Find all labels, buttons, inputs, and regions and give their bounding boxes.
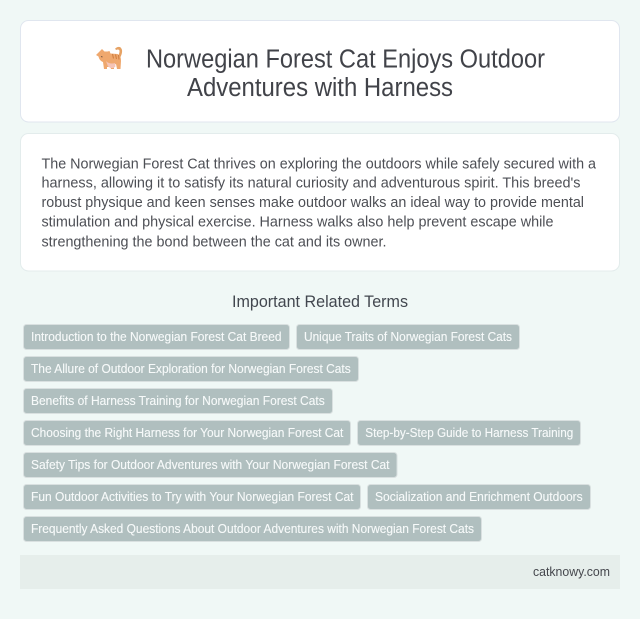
tag: allure of exploration: The Allure of Outdoor Exploration for Norwegian Forest Cats [31, 362, 351, 376]
tag: step-by-step guide: Step-by-Step Guide to Harness Training [365, 426, 573, 440]
tag: choosing the right harness: Choosing the Right Harness for Your Norwegian Forest Cat [31, 426, 344, 440]
tag: safety tips: Safety Tips for Outdoor Adventures with Your Norwegian Forest Cat [31, 458, 390, 472]
tag: introduction [24, 324, 290, 350]
title text [146, 46, 545, 102]
tag: introduction: Introduction to the Norwegian Forest Cat Breed [31, 330, 282, 344]
tag: frequently asked questions [24, 516, 482, 542]
description text: stimulation and physical exercise. Harness walks also help prevent escape while [42, 214, 554, 231]
tag: fun outdoor activities [24, 484, 360, 510]
tag: benefits of harness training: Benefits of Harness Training for Norwegian Forest Cats [31, 394, 325, 408]
icon: orange cat [96, 47, 122, 69]
tag: allure of exploration [24, 356, 358, 382]
footer source text: catknowy.com [533, 564, 610, 579]
panel: description card [20, 134, 620, 271]
tag: frequently asked questions: Frequently Asked Questions About Outdoor Adventures with Norwegian Forest Cats [31, 522, 474, 536]
panel: title card [20, 20, 620, 122]
tag: choosing the right harness [24, 420, 350, 446]
description text: robust physique and keen senses make outdoor walks an ideal way to provide mental [42, 194, 584, 211]
title text: Adventures with Harness [187, 74, 453, 102]
description text: The Norwegian Forest Cat thrives on exploring the outdoors while safely secured with a [42, 155, 597, 172]
heading: important related terms: Important Related Terms [232, 293, 408, 311]
tag: socialization and enrichment [368, 484, 590, 510]
tag: fun outdoor activities: Fun Outdoor Activities to Try with Your Norwegian Forest Cat [31, 490, 354, 504]
title text: Norwegian Forest Cat Enjoys Outdoor [146, 46, 545, 74]
tag: step-by-step guide [358, 420, 580, 446]
footer bar [20, 555, 620, 589]
description text: harness, allowing it to satisfy its natural curiosity and adventurous spirit. This breed's [42, 175, 581, 192]
tag list [24, 324, 590, 542]
description text: strengthening the bond between the cat and its owner. [42, 233, 386, 250]
tag: unique traits [296, 324, 520, 350]
tag: socialization and enrichment: Socialization and Enrichment Outdoors [375, 490, 583, 504]
tag: benefits of harness training [24, 388, 332, 414]
description text [42, 155, 597, 250]
tag: safety tips [24, 452, 397, 478]
tag: unique traits: Unique Traits of Norwegian Forest Cats [304, 330, 512, 344]
